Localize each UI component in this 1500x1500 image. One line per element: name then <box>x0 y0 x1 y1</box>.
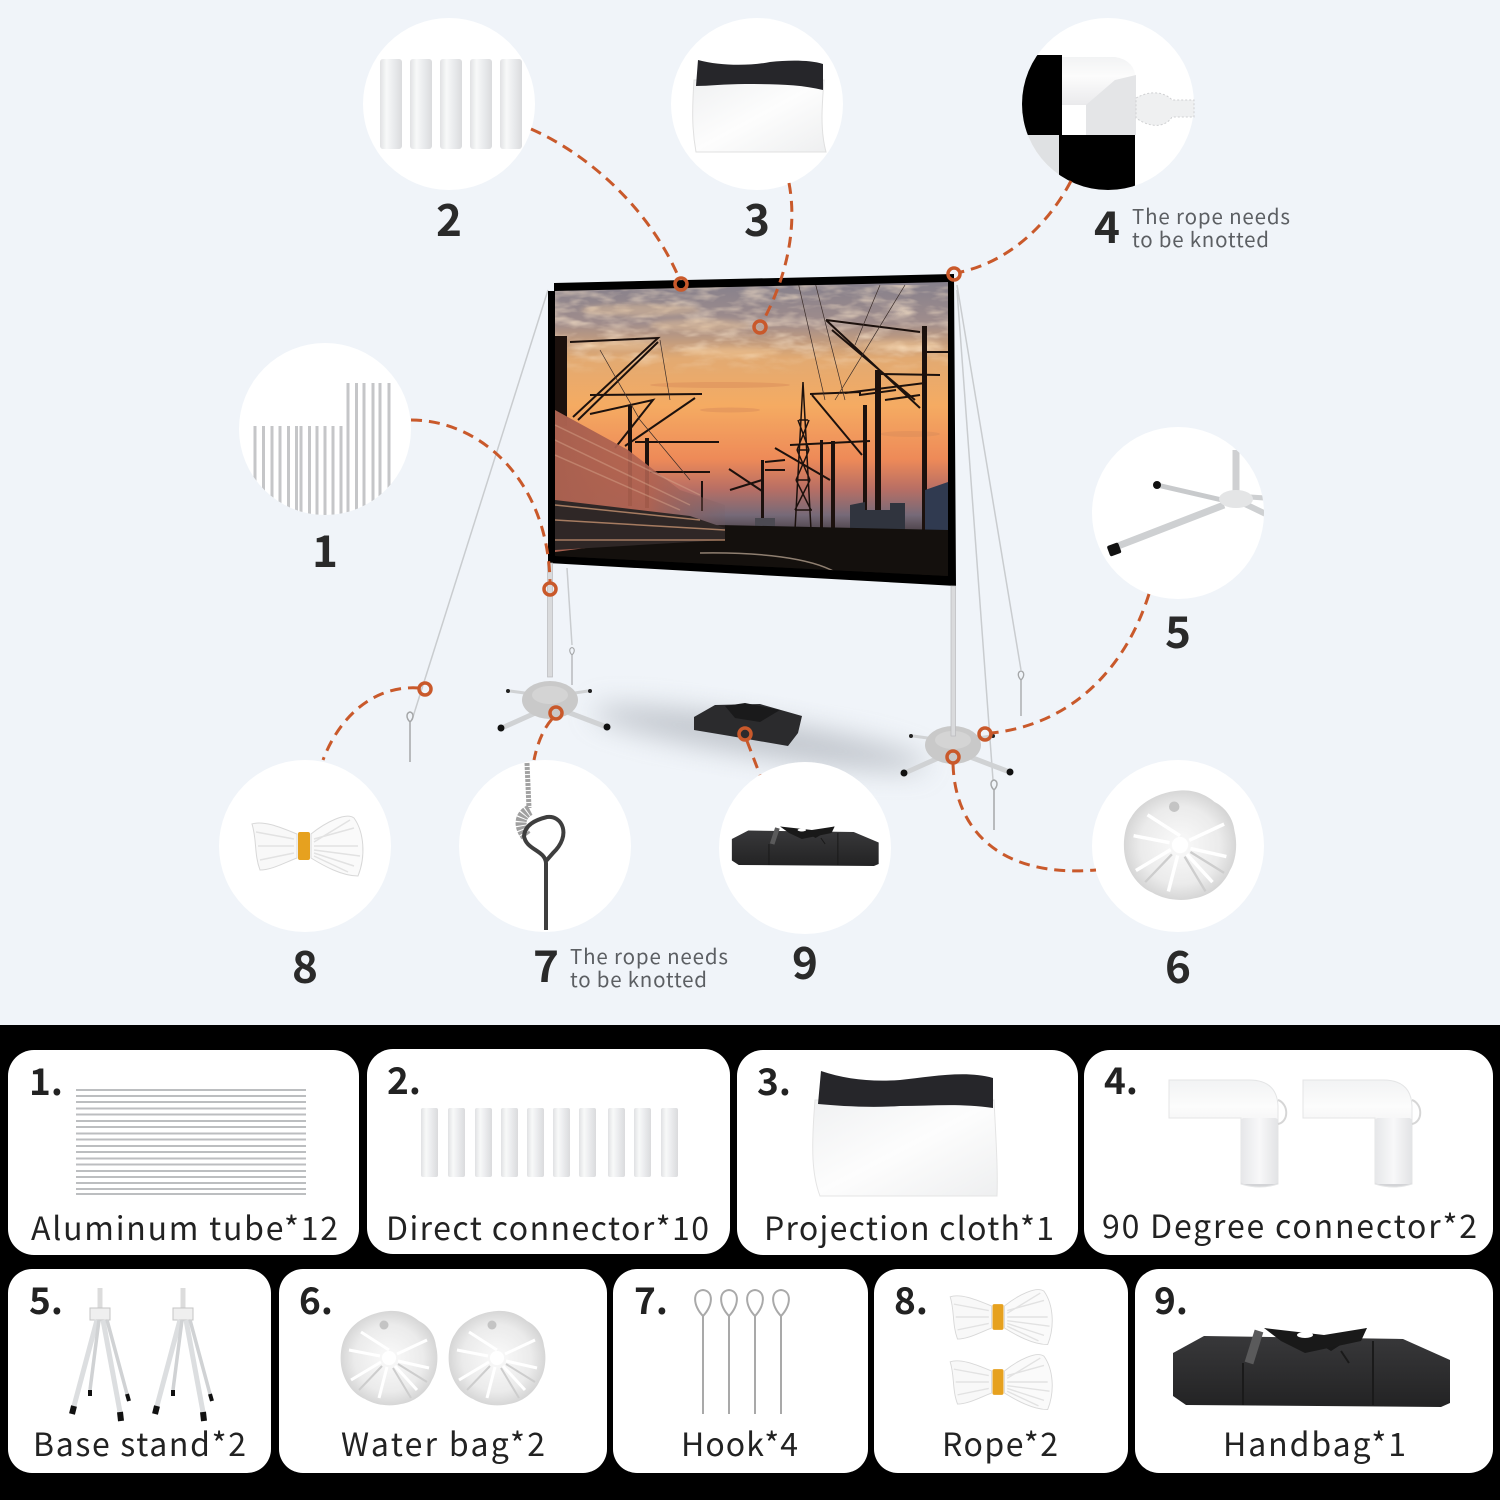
card 2: direct connector <box>367 1049 730 1254</box>
card 8: rope: 8. <box>894 1271 928 1325</box>
number 5: 5 <box>1165 597 1191 661</box>
number 8: 8 <box>292 932 318 996</box>
card 2: direct connector: Direct connector*10 <box>386 1204 709 1250</box>
speeding train <box>555 410 725 552</box>
card 3: projection cloth <box>737 1050 1078 1255</box>
number 1: 1 <box>312 516 338 580</box>
card 4: 90 degree connector: 4. <box>1104 1051 1138 1105</box>
card 3: projection cloth: Projection cloth*1 <box>764 1204 1054 1250</box>
circle 1: aluminum tubes <box>239 343 411 515</box>
number 4 with note: 4 <box>1094 192 1120 256</box>
card 6: water bag: 6. <box>299 1271 333 1325</box>
number 4 with note: to be knotted <box>1132 223 1269 253</box>
card 2: direct connector: 2. <box>387 1051 421 1105</box>
circle 4: corner connector with knotted rope <box>1020 18 1194 195</box>
projector screen <box>412 274 1021 780</box>
circle 6: water bag <box>1092 760 1264 932</box>
circle 2: direct connectors <box>363 18 535 190</box>
circle 5: base stand <box>1092 427 1270 599</box>
card 4: 90 degree connector: 90 Degree connector*2 <box>1102 1202 1477 1248</box>
number 4 with note: The rope needs <box>1132 200 1290 230</box>
card 1: aluminum tube <box>8 1050 359 1255</box>
card 7: hook <box>613 1269 868 1473</box>
carry bag on the ground <box>694 703 802 746</box>
black parts panel <box>0 1025 1500 1500</box>
screen frame <box>548 274 956 586</box>
ground <box>674 525 948 544</box>
card 6: water bag: Water bag*2 <box>341 1420 545 1466</box>
card 9: handbag: 9. <box>1154 1271 1188 1325</box>
circle 9: handbag <box>719 762 891 934</box>
card 5: base stand: Base stand*2 <box>33 1420 246 1466</box>
edge of the screen <box>548 295 550 560</box>
card 5: base stand: 5. <box>29 1271 63 1325</box>
circle 3: projection cloth <box>671 18 843 190</box>
card 7: hook: Hook*4 <box>681 1420 798 1466</box>
number 6: 6 <box>1165 932 1191 996</box>
card 8: rope <box>874 1269 1128 1473</box>
number 2: 2 <box>436 185 462 249</box>
number 7 with note: to be knotted <box>570 963 707 993</box>
circle 7: hook with rope <box>459 760 631 932</box>
number 7 with note <box>533 931 728 995</box>
number 7 with note: The rope needs <box>570 940 728 970</box>
number 4 with note <box>1094 192 1290 256</box>
dashed callout lines <box>323 129 1149 871</box>
number 9: 9 <box>792 928 818 992</box>
card 9: handbag <box>1135 1269 1493 1473</box>
card 9: handbag: Handbag*1 <box>1223 1420 1406 1466</box>
ground stakes <box>407 648 1024 830</box>
card 6: water bag <box>279 1269 607 1473</box>
number 3: 3 <box>744 185 770 249</box>
circle 8: rope <box>219 760 391 932</box>
left stand <box>498 563 610 732</box>
lattice tower <box>795 382 812 530</box>
card 8: rope: Rope*2 <box>942 1420 1058 1466</box>
right stand <box>900 586 1014 776</box>
number 7 with note: 7 <box>533 931 559 995</box>
top background <box>0 0 1500 1026</box>
poles and arms <box>555 284 948 530</box>
card 1: aluminum tube: Aluminum tube*12 <box>31 1204 338 1250</box>
card 7: hook: 7. <box>634 1271 668 1325</box>
card 5: base stand <box>8 1269 271 1473</box>
card 4: 90 degree connector <box>1084 1050 1493 1255</box>
screen photo: sunset railway <box>555 282 950 580</box>
distant buildings <box>850 502 905 529</box>
card 3: projection cloth: 3. <box>757 1052 791 1106</box>
ground shadow <box>589 695 931 781</box>
guy ropes and stakes <box>412 285 1021 780</box>
card 1: aluminum tube: 1. <box>29 1052 63 1106</box>
